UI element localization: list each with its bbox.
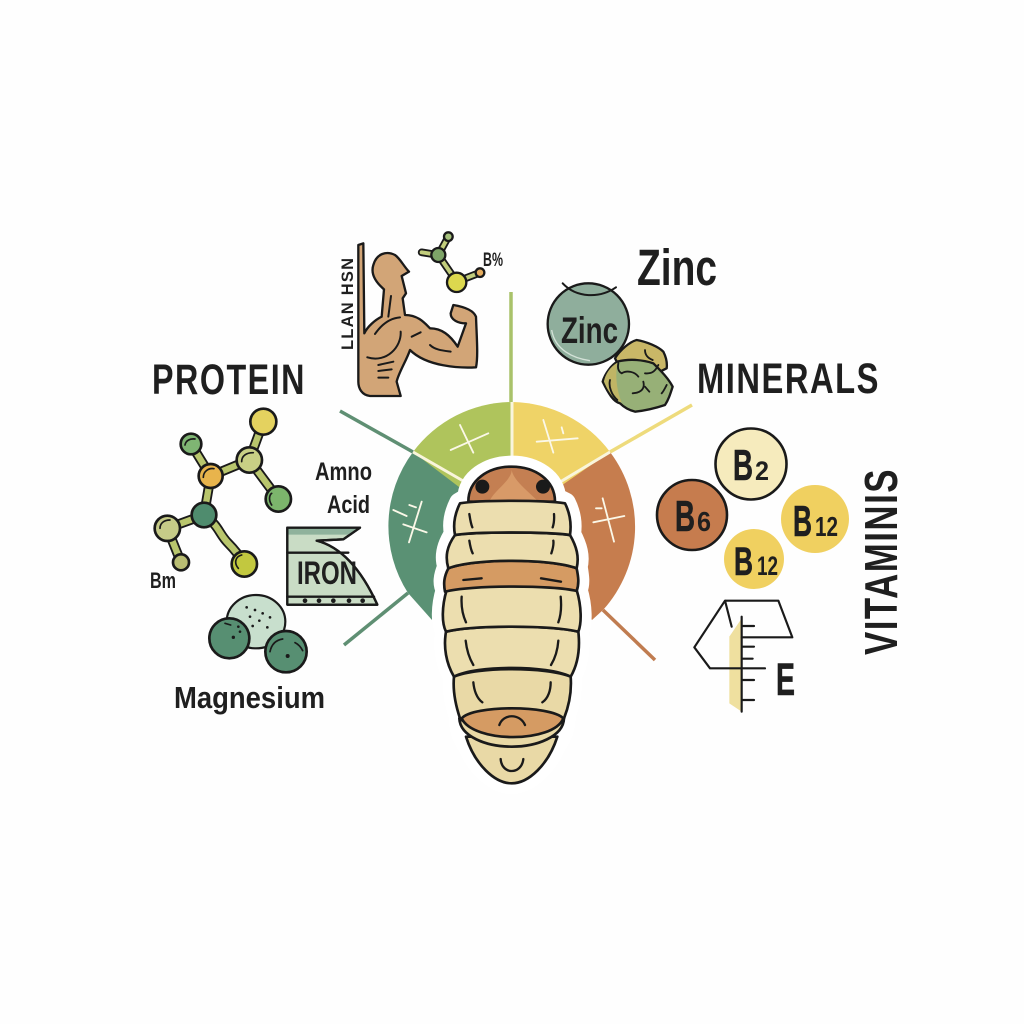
segment: orange: [555, 452, 635, 620]
vitamin b2: B: [733, 441, 753, 490]
icon: zinc sphere and rocks: [548, 283, 673, 412]
larva detail marks: [462, 514, 561, 771]
label: amino acid: Amno: [315, 458, 372, 486]
icon group: b vitamins: [657, 428, 849, 589]
larva body segment 6: [454, 669, 571, 730]
segment: lime: [413, 402, 511, 490]
spoke lines: [340, 292, 692, 660]
heading: protein: PROTEIN: [152, 356, 306, 404]
icon: iron block: [287, 528, 377, 605]
label: magnesium: Magnesium: [174, 680, 325, 715]
icon: vitamin e gauge: [694, 601, 792, 712]
label: amino acid: [315, 458, 372, 519]
larva tail: [466, 737, 557, 783]
segment dividers: [413, 402, 610, 482]
segment: protein green: [388, 452, 470, 620]
larva illustration: [443, 467, 581, 783]
heading: minerals: MINERALS: [697, 355, 880, 403]
vitamin b12 right: 12: [815, 511, 838, 542]
label: vertical llan hsn: LLAN HSN: [339, 258, 357, 350]
vitamin b6: 6: [697, 506, 711, 537]
larva orange band: [444, 561, 578, 592]
vitamin b12 lower: 12: [757, 551, 778, 581]
larva body segment 1: [454, 501, 571, 535]
larva rear orange ellipse: [462, 708, 563, 737]
label: amino acid: Acid: [327, 491, 370, 519]
label: b percent: B%: [483, 250, 503, 271]
larva head: [468, 467, 555, 502]
larva body segment 4: [443, 586, 581, 632]
radial segment ring: [388, 402, 635, 620]
white tick marks: [393, 420, 624, 542]
larva body segment 2: [447, 532, 578, 568]
vitamin b6: [657, 480, 727, 550]
larva body segment 5: [445, 627, 579, 677]
icon: magnesium spheres: [209, 595, 307, 672]
vitamin b2: [716, 428, 786, 500]
larva white halo: [443, 467, 581, 783]
icon: amino molecule: [155, 409, 291, 577]
icon: small molecule: [422, 232, 484, 292]
label: zinc on sphere: Zinc: [561, 310, 618, 351]
vitamin b12 lower: B: [734, 540, 753, 584]
label: bm: Bm: [150, 568, 176, 593]
vitamin b12 lower: [724, 529, 784, 589]
heading: zinc: Zinc: [637, 239, 717, 296]
larva body segment 8: [459, 718, 564, 747]
label: e: E: [776, 654, 795, 705]
label: iron: IRON: [297, 555, 357, 591]
vitamin b12 right: B: [793, 497, 812, 546]
icon: muscle figure: [358, 243, 477, 396]
vitamin b6: B: [675, 492, 695, 541]
segment: yellow: [513, 402, 610, 490]
heading: vitamins: VITAMINIS: [855, 468, 907, 655]
vitamin b2: 2: [755, 456, 769, 486]
vitamin b12 right: [781, 485, 849, 553]
